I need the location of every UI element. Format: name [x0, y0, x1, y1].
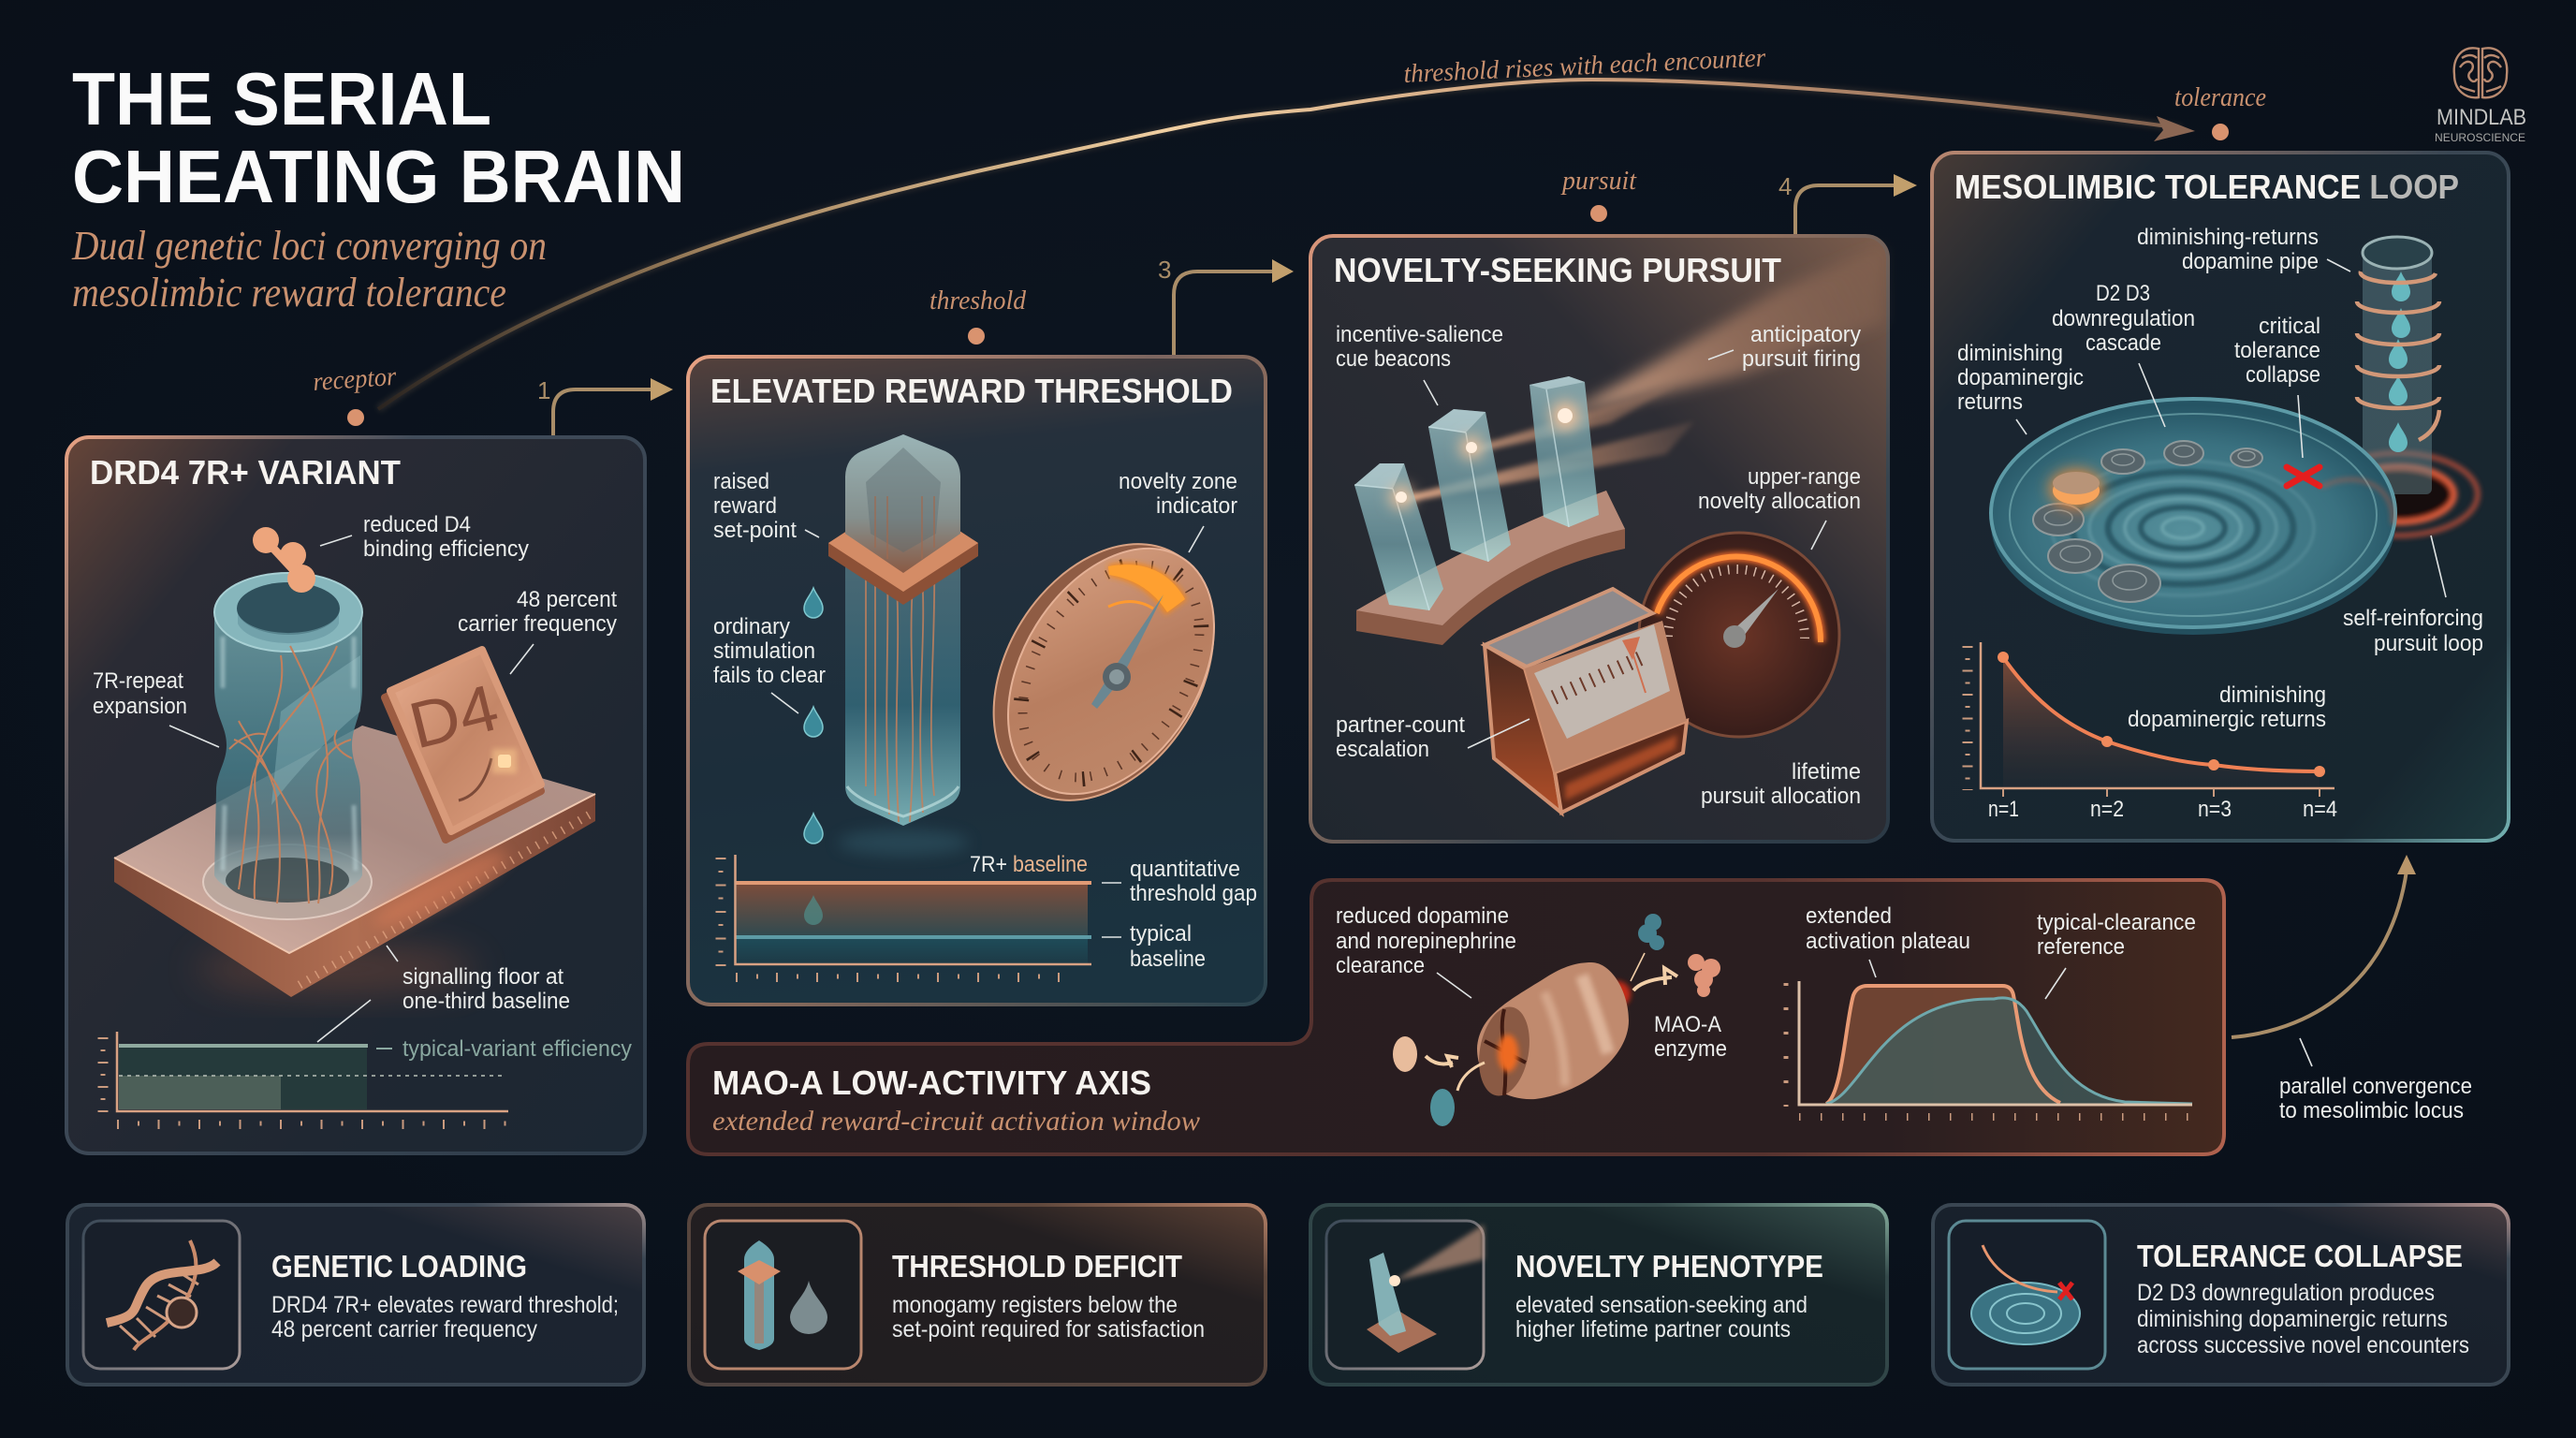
callouts: returns	[1957, 389, 2023, 415]
callouts: dopaminergic	[1957, 365, 2084, 390]
stage marker: tolerance	[2174, 83, 2266, 140]
card: genetic loading	[67, 1205, 644, 1385]
card: threshold deficit	[689, 1205, 1266, 1385]
callouts: MAO-A	[1654, 1012, 1721, 1037]
heading: MESOLIMBIC TOLERANCE LOOP	[1954, 168, 2459, 206]
chart: dopaminergic returns per encounter: n=1	[1988, 797, 2019, 822]
subtitle: Dual genetic loci converging on	[71, 223, 547, 269]
callouts: stimulation	[713, 638, 815, 664]
subtitle	[71, 223, 547, 315]
text: NOVELTY PHENOTYPE	[1515, 1249, 1823, 1284]
callout: parallel convergence	[2279, 1038, 2472, 1123]
callouts	[1957, 225, 2483, 732]
callouts: typical	[1130, 921, 1192, 946]
subtitle: mesolimbic reward tolerance	[72, 270, 506, 315]
icon: dish with falling curve	[1949, 1221, 2105, 1369]
text	[892, 1249, 1205, 1343]
illustration: platform, glass receptor and D4 tile	[114, 527, 595, 997]
arc caption: threshold rises with each encounter	[1403, 43, 1766, 89]
arrow 3	[1158, 256, 1294, 356]
callouts: anticipatory	[1750, 322, 1861, 347]
callouts: indicator	[1156, 493, 1237, 519]
text: D2 D3 downregulation produces	[2137, 1280, 2435, 1306]
callouts: ordinary	[713, 614, 790, 639]
callouts: binding efficiency	[363, 536, 529, 562]
icon: crystal and drop	[705, 1221, 861, 1369]
logo: Mindlab Neuroscience: MINDLAB	[2437, 105, 2526, 130]
callouts: expansion	[93, 694, 187, 719]
logo: Mindlab Neuroscience: NEUROSCIENCE	[2435, 131, 2525, 144]
logo: Mindlab Neuroscience	[2435, 48, 2526, 144]
callouts: critical	[2259, 314, 2320, 339]
icon: DNA helix	[83, 1221, 240, 1369]
callouts: cascade	[2086, 330, 2161, 356]
callouts: diminishing	[2219, 682, 2326, 708]
callouts: incentive-salience	[1336, 322, 1503, 347]
stage marker: receptor: receptor	[312, 362, 397, 397]
text: higher lifetime partner counts	[1515, 1316, 1791, 1343]
callouts: baseline	[1130, 946, 1206, 972]
subheading: extended reward-circuit activation window	[712, 1106, 1200, 1137]
callouts: lifetime	[1792, 759, 1861, 785]
callouts	[1336, 903, 2196, 1062]
chart: dopaminergic returns per encounter: n=2	[2090, 797, 2124, 822]
callout: parallel convergence: parallel convergence	[2279, 1074, 2472, 1099]
card: tolerance collapse	[1933, 1205, 2509, 1385]
chart: threshold gap	[721, 855, 1091, 977]
illustration: reward dial	[948, 504, 1259, 841]
callouts: collapse	[2246, 362, 2320, 388]
text	[271, 1249, 619, 1343]
callouts: set-point	[713, 518, 797, 543]
callouts: and norepinephrine	[1336, 929, 1516, 954]
callouts: novelty allocation	[1698, 489, 1861, 514]
callouts: reward	[713, 493, 777, 519]
illustration: beacon prisms and arc base	[1354, 245, 1883, 645]
callouts: reduced D4	[363, 512, 471, 537]
callouts: novelty zone	[1119, 469, 1237, 494]
text: across successive novel encounters	[2137, 1332, 2469, 1358]
panel: elevated reward threshold	[688, 357, 1266, 1005]
callouts: 7R-repeat	[93, 668, 183, 694]
callout: parallel convergence: to mesolimbic locus	[2279, 1098, 2464, 1123]
callouts: 48 percent	[517, 587, 617, 612]
stage marker: pursuit: pursuit	[1560, 167, 1637, 196]
callouts	[93, 512, 632, 1062]
callouts: escalation	[1336, 737, 1429, 762]
stage marker: threshold	[929, 286, 1027, 345]
panel: novelty-seeking pursuit	[1310, 236, 1888, 842]
stage marker: receptor	[312, 362, 397, 426]
callouts: partner-count	[1336, 712, 1465, 738]
chart: dopaminergic returns per encounter	[1968, 642, 2337, 822]
callouts: pursuit loop	[2374, 631, 2483, 656]
title: THE SERIAL	[72, 57, 491, 140]
callouts	[1336, 322, 1861, 809]
text: THRESHOLD DEFICIT	[892, 1249, 1182, 1284]
callouts: diminishing-returns	[2137, 225, 2319, 250]
callouts: 7R+ baseline	[970, 852, 1088, 877]
card: novelty phenotype	[1310, 1205, 1887, 1385]
callouts: dopaminergic returns	[2128, 707, 2326, 732]
text: GENETIC LOADING	[271, 1249, 527, 1284]
illustration: platform, glass receptor and D4 tile: D4	[402, 670, 505, 763]
illustration: dark novelty gauge	[1639, 533, 1839, 737]
callouts: pursuit firing	[1742, 346, 1861, 372]
illustration: partner-count meter box	[1485, 589, 1687, 813]
chart: receptor efficiency	[103, 1032, 508, 1124]
heading: NOVELTY-SEEKING PURSUIT	[1334, 251, 1781, 289]
stage marker: tolerance: tolerance	[2174, 83, 2266, 112]
illustration: cracked MAO-A enzyme	[1472, 962, 1631, 1100]
chart: dopaminergic returns per encounter: n=4	[2303, 797, 2337, 822]
text	[2137, 1239, 2469, 1358]
callouts: typical-variant efficiency	[402, 1036, 632, 1062]
panel: mesolimbic tolerance loop	[1932, 153, 2509, 841]
callouts	[713, 469, 1257, 972]
text: DRD4 7R+ elevates reward threshold;	[271, 1292, 619, 1318]
chart: activation plateau	[1786, 981, 2192, 1117]
callouts: clearance	[1336, 953, 1425, 978]
callouts: D2 D3	[2096, 281, 2150, 306]
heading: DRD4 7R+ VARIANT	[90, 453, 401, 492]
arrow 1	[537, 376, 673, 436]
callouts: dopamine pipe	[2182, 249, 2319, 274]
callouts: downregulation	[2052, 306, 2195, 331]
callouts: upper-range	[1748, 464, 1861, 490]
illustration: ripple dish and dopamine pipe	[1991, 237, 2478, 635]
callouts: cue beacons	[1336, 346, 1451, 372]
chart: dopaminergic returns per encounter: n=3	[2198, 797, 2232, 822]
illustration: crystal column with collar	[828, 434, 978, 856]
callouts: reduced dopamine	[1336, 903, 1509, 929]
callouts: self-reinforcing	[2343, 606, 2483, 631]
callouts: reference	[2037, 934, 2125, 960]
callouts: raised	[713, 469, 769, 494]
arrow 4: 4	[1778, 172, 1792, 200]
callouts: one-third baseline	[402, 989, 570, 1014]
callouts: diminishing	[1957, 341, 2063, 366]
text: diminishing dopaminergic returns	[2137, 1306, 2448, 1332]
heading: MAO-A LOW-ACTIVITY AXIS	[712, 1064, 1151, 1102]
icons: stimulation drops	[804, 588, 823, 844]
callouts: extended	[1806, 903, 1892, 929]
callouts: typical-clearance	[2037, 910, 2196, 935]
callouts: quantitative	[1130, 857, 1240, 882]
text: TOLERANCE COLLAPSE	[2137, 1239, 2463, 1273]
arrow: parallel convergence	[2232, 855, 2416, 1037]
stage marker: threshold: threshold	[929, 286, 1027, 315]
arrow: threshold rising arc	[378, 80, 2195, 409]
text: elevated sensation-seeking and	[1515, 1292, 1808, 1318]
text: set-point required for satisfaction	[892, 1316, 1205, 1343]
arrow 3: 3	[1158, 256, 1171, 284]
callouts: fails to clear	[713, 663, 826, 688]
text: 48 percent carrier frequency	[271, 1316, 537, 1343]
panel: DRD4 7R+ variant	[66, 437, 645, 1153]
panel: MAO-A low-activity axis	[688, 880, 2224, 1154]
text	[1515, 1249, 1823, 1343]
title	[72, 57, 685, 218]
icons: substrates and reaction arrows	[1393, 914, 1720, 1126]
stage marker: pursuit	[1560, 167, 1637, 222]
arrow 4	[1778, 172, 1917, 235]
callouts: carrier frequency	[458, 611, 617, 637]
callouts: threshold gap	[1130, 881, 1257, 906]
callouts: tolerance	[2234, 338, 2320, 363]
arrow 1: 1	[537, 376, 550, 404]
text: monogamy registers below the	[892, 1292, 1178, 1318]
callouts: activation plateau	[1806, 929, 1970, 954]
callouts: pursuit allocation	[1701, 784, 1861, 809]
callouts: signalling floor at	[402, 964, 564, 990]
heading: ELEVATED REWARD THRESHOLD	[710, 372, 1233, 410]
callouts: enzyme	[1654, 1036, 1727, 1062]
icon: beacon prism	[1326, 1221, 1484, 1369]
title: CHEATING BRAIN	[72, 135, 685, 218]
